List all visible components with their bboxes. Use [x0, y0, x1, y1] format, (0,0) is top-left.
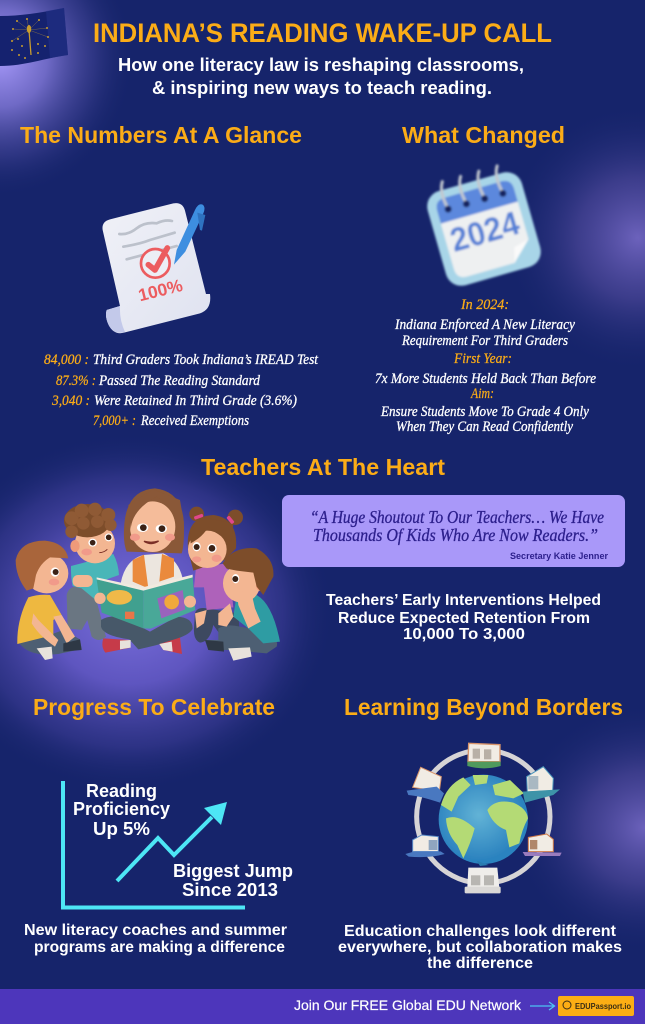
text block: numbers list: 7,000+ :: [93, 413, 136, 429]
chart: rising line with labels: [63, 780, 293, 908]
icon: 2024 calendar: [421, 161, 545, 290]
text block: numbers list: Were Retained In Third Grade (3.6%): [94, 393, 297, 409]
teacher: [101, 488, 193, 654]
footer banner: [0, 989, 645, 1024]
text block: numbers list: Third Graders Took Indiana’s IREAD Test: [93, 352, 319, 368]
chart: rising line with labels: Biggest Jump: [173, 860, 293, 881]
text block: numbers list: [44, 352, 319, 429]
subtitle: [118, 54, 524, 98]
text block: what changed: Indiana Enforced A New Literacy: [394, 317, 575, 333]
arrow: to logo: [530, 1002, 554, 1010]
subtitle: How one literacy law is reshaping classrooms,: [118, 54, 524, 75]
text block: what changed: 7x More Students Held Back Than Before: [375, 371, 596, 387]
chart: rising line with labels: Proficiency: [73, 798, 171, 819]
icon: 2024 calendar: 2024: [446, 204, 524, 259]
text block: teachers' early interventions: Reduce Expected Retention From: [338, 610, 590, 627]
text block: numbers list: Received Exemptions: [140, 413, 249, 429]
heading: Progress To Celebrate: Progress To Celebrate: [33, 694, 275, 720]
illustration: teacher reading with children: [16, 488, 280, 661]
callout: teacher quote: “A Huge Shoutout To Our Teachers… We Have: [310, 507, 604, 527]
icon: test paper with 100%: [102, 203, 210, 333]
heading: Teachers At The Heart: Teachers At The Heart: [201, 454, 445, 480]
text block: what changed: Requirement For Third Graders: [401, 333, 568, 349]
text block: what changed: In 2024:: [460, 297, 509, 313]
text block: collaboration: Education challenges look different: [344, 923, 617, 940]
text block: collaboration: everywhere, but collaboration makes: [338, 939, 622, 956]
subtitle: & inspiring new ways to teach reading.: [152, 77, 492, 98]
text block: literacy coaches: programs are making a difference: [34, 939, 285, 956]
text block: what changed: [375, 297, 596, 435]
boy on left: [16, 541, 82, 660]
text block: collaboration: [338, 923, 622, 972]
chart: rising line with labels: Up 5%: [93, 818, 150, 839]
text block: numbers list: Passed The Reading Standard: [98, 373, 260, 389]
chart: rising line with labels: Since 2013: [182, 879, 278, 900]
book: [94, 575, 196, 629]
text block: numbers list: 87.3% :: [56, 373, 96, 389]
logo: EDUPassport.io: EDUPassport.io: [575, 1002, 631, 1011]
girl with buns: [188, 507, 243, 643]
text block: teachers' early interventions: [326, 592, 601, 643]
text block: numbers list: 3,040 :: [51, 393, 90, 409]
school: bottom: [465, 868, 501, 893]
heading: Learning Beyond Borders: Learning Beyond Borders: [344, 694, 623, 720]
text block: literacy coaches: New literacy coaches and summer: [24, 922, 287, 939]
curly-haired boy: [64, 503, 119, 640]
heading: What Changed: What Changed: [402, 122, 565, 148]
school: upper left: [407, 767, 444, 803]
school: top: [467, 743, 501, 768]
footer banner: Join Our FREE Global EDU Network: [294, 997, 522, 1013]
school: upper right: [523, 767, 560, 803]
text block: what changed: First Year:: [453, 351, 512, 367]
text block: collaboration: the difference: [427, 955, 533, 972]
school: lower left: [405, 835, 445, 857]
heading: The Numbers At A Glance: The Numbers At A Glance: [20, 122, 302, 148]
text block: what changed: When They Can Read Confidently: [396, 419, 573, 435]
callout: teacher quote: Secretary Katie Jenner: [510, 551, 608, 562]
illustration: globe with connected schools: [405, 743, 562, 893]
logo: EDUPassport.io: [558, 996, 634, 1016]
text block: literacy coaches: [24, 922, 287, 956]
boy on right: [205, 548, 280, 661]
chart: rising line with labels: Reading: [86, 780, 157, 801]
text block: what changed: Aim:: [470, 386, 494, 402]
school: lower right: [523, 834, 562, 856]
callout: teacher quote: Thousands Of Kids Who Are Now Readers.”: [313, 525, 598, 545]
globe: [439, 775, 528, 866]
text block: numbers list: 84,000 :: [44, 352, 89, 368]
icon: Indiana flag: [0, 8, 68, 66]
text block: teachers' early interventions: Teachers’ Early Interventions Helped: [326, 592, 601, 609]
text block: what changed: Ensure Students Move To Grade 4 Only: [380, 404, 589, 420]
text block: teachers' early interventions: 10,000 To 3,000: [403, 626, 525, 643]
callout: teacher quote: [282, 495, 625, 567]
title: INDIANA’S READING WAKE-UP CALL: [93, 18, 552, 48]
icon: test paper with 100%: 100%: [136, 275, 185, 305]
